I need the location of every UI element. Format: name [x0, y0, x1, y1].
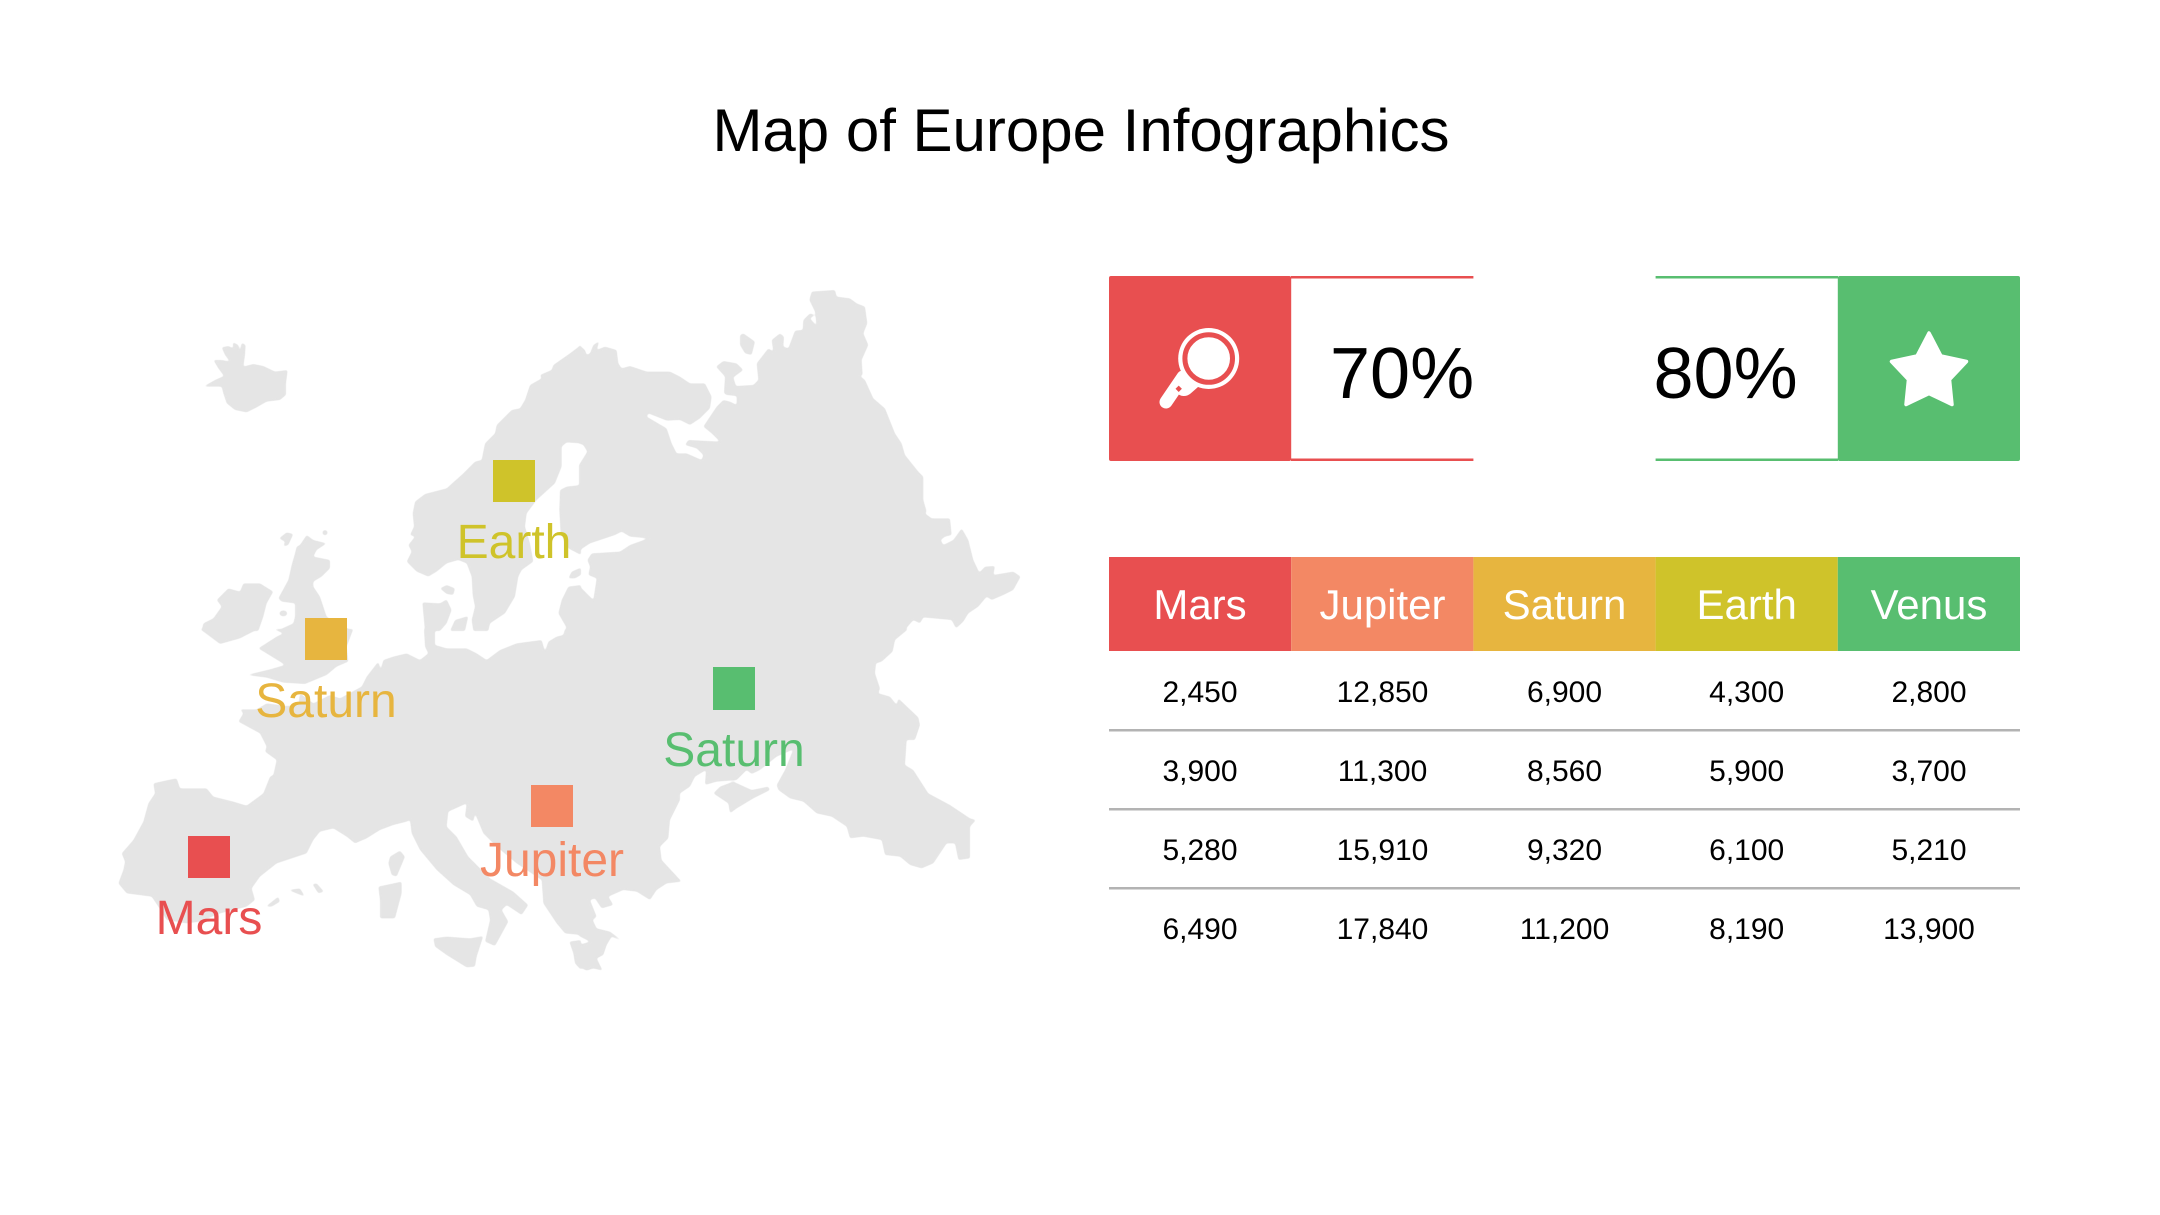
table row 3: 6,100: [1709, 834, 1784, 867]
marker: Saturn (east): [663, 667, 805, 777]
table row 2: 3,700: [1891, 755, 1967, 788]
table row 3: [1162, 834, 1967, 867]
table row 2: 11,300: [1338, 755, 1427, 788]
table row 3: 9,320: [1527, 834, 1602, 867]
table row 2: [1162, 755, 1967, 788]
table row 4: 6,490: [1162, 913, 1238, 946]
table row 3: 5,210: [1891, 834, 1967, 867]
map region: north-west Europe: [202, 342, 581, 631]
table row 1: [1162, 676, 1967, 709]
marker: Mars: [156, 836, 262, 945]
map region: south-east Europe: [579, 629, 976, 971]
table row 4: [1162, 913, 1975, 946]
table row 1: 6,900: [1527, 676, 1602, 709]
stat card: 70%: 70%: [1330, 334, 1474, 414]
marker: Saturn (west): Saturn: [255, 675, 397, 728]
marker: Saturn (east): Saturn: [663, 724, 805, 777]
table row 1: 4,300: [1709, 676, 1784, 709]
table row 2: 3,900: [1162, 755, 1238, 788]
table row 2: 5,900: [1709, 755, 1784, 788]
icon: star: [1892, 333, 1966, 404]
stat card: 80%: [1654, 276, 2020, 461]
table row 4: 13,900: [1883, 913, 1975, 946]
table row 3: 5,280: [1162, 834, 1238, 867]
table header: Jupiter: [1319, 581, 1446, 628]
table header: Saturn: [1503, 581, 1626, 628]
marker: Jupiter: [480, 785, 624, 887]
marker: Saturn (west): [255, 618, 397, 728]
marker: Earth: Earth: [457, 516, 571, 569]
stat card: 80%: 80%: [1654, 334, 1798, 414]
table header: Mars: [1153, 581, 1247, 628]
data table: [1109, 557, 2020, 946]
table row 4: 8,190: [1709, 913, 1784, 946]
table row 1: 2,800: [1891, 676, 1967, 709]
marker: Mars: Mars: [156, 892, 262, 945]
table row 1: 12,850: [1337, 676, 1428, 709]
map of Europe: [118, 290, 1021, 971]
table row 1: 2,450: [1162, 676, 1238, 709]
table row 2: 8,560: [1527, 755, 1602, 788]
stat card: 70%: [1109, 276, 1474, 461]
table row 4: 11,200: [1520, 913, 1609, 946]
table row 3: 15,910: [1337, 834, 1428, 867]
table header: Venus: [1871, 581, 1987, 628]
title: Map of Europe Infographics: [712, 97, 1450, 164]
marker: Earth: [457, 460, 571, 569]
table header: [1109, 557, 2020, 651]
table row 4: 17,840: [1337, 913, 1428, 946]
marker: Jupiter: Jupiter: [480, 834, 624, 887]
map region: north-east Europe: [579, 290, 1021, 632]
icon: magnifying glass: [1166, 328, 1239, 402]
map region: south-west Europe: [118, 629, 581, 970]
table header: Earth: [1697, 581, 1797, 628]
